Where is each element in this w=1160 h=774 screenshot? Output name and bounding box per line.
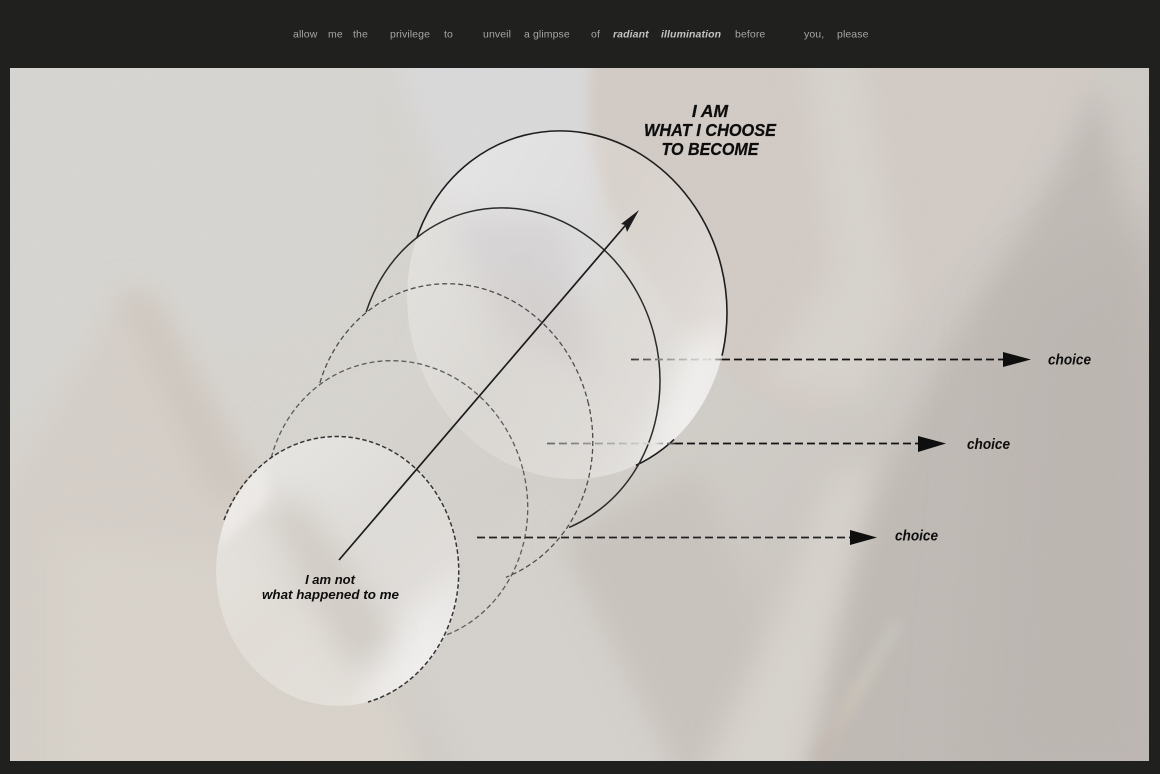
label: I am not what happened to me: what happened to me: [262, 587, 399, 602]
heading: I am what I choose to become: [644, 101, 777, 159]
header line of text: illumination: [661, 28, 721, 40]
glass disc: lower: [215, 436, 470, 710]
header line of text: [293, 28, 869, 40]
label: choice top: choice: [1048, 352, 1091, 368]
header line of text: privilege: [390, 28, 430, 40]
header line of text: of: [591, 28, 600, 40]
heading: I am what I choose to become: WHAT I CHOOSE: [644, 120, 777, 140]
header line of text: unveil: [483, 28, 511, 40]
label: I am not what happened to me: I am not: [305, 572, 356, 587]
circle outlines: five stages: [223, 130, 728, 703]
heading: I am what I choose to become: I AM: [692, 101, 729, 121]
heading: I am what I choose to become: TO BECOME: [662, 139, 760, 159]
header line of text: a glimpse: [524, 28, 570, 40]
header line of text: radiant: [613, 28, 649, 40]
choice arrow: bottom: [477, 530, 877, 545]
label: I am not what happened to me: [262, 572, 399, 602]
choice arrow: middle: [547, 436, 946, 452]
header line of text: to: [444, 28, 453, 40]
header line of text: the: [353, 28, 368, 40]
header line of text: you,: [804, 28, 824, 40]
header line of text: please: [837, 28, 869, 40]
glass disc: upper: [407, 132, 726, 479]
header line of text: before: [735, 28, 765, 40]
label: choice bottom: choice: [895, 528, 938, 544]
growth arrow: [339, 210, 639, 560]
label: choice middle: choice: [967, 436, 1010, 453]
header line of text: me: [328, 28, 343, 40]
light streak: [854, 688, 860, 698]
choice arrow: top: [631, 352, 1031, 367]
header line of text: allow: [293, 28, 318, 40]
